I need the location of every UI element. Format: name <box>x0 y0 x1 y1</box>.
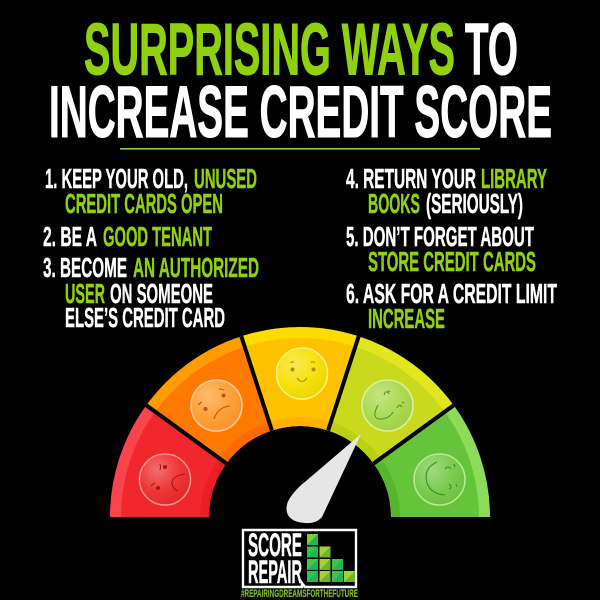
list: left column: 2. BE A <box>43 221 97 252</box>
gauge segment: yellow <box>241 327 359 430</box>
gauge needle <box>286 434 361 523</box>
face: neutral smile <box>276 348 328 399</box>
title <box>49 10 552 153</box>
list: right column: INCREASE <box>368 303 445 334</box>
list: left column: 3. BECOME <box>43 252 127 283</box>
list: left column: GOOD TENANT <box>103 221 212 252</box>
list: right column: LIBRARY <box>481 163 547 194</box>
list: left column: ON SOMEONE <box>110 278 213 309</box>
list: right column <box>346 163 557 334</box>
list: right column: BOOKS <box>368 188 420 219</box>
list: left column: AN AUTHORIZED <box>133 252 259 283</box>
face: happy <box>362 380 413 431</box>
logo: REPAIR <box>248 554 302 590</box>
logo wordmark <box>248 527 302 590</box>
list: left column: USER <box>65 278 105 309</box>
gauge segment: red <box>110 405 226 517</box>
logo <box>241 527 358 600</box>
list: right column: (SERIOUSLY) <box>426 188 523 219</box>
logo tagline: #REPAIRINGDREAMSFORTHEFUTURE <box>241 588 358 600</box>
face: angry <box>140 454 190 505</box>
list: left column <box>43 163 259 333</box>
list: right column: 4. RETURN YOUR <box>346 163 476 194</box>
list: left column: CREDIT CARDS OPEN <box>65 188 223 219</box>
face: very happy <box>414 454 465 505</box>
list: left column: UNUSED <box>194 163 257 194</box>
face: sad <box>191 380 242 431</box>
gauge segment: orange <box>146 336 272 464</box>
logo frame <box>243 530 356 587</box>
logo bar grid <box>307 534 355 582</box>
gauge <box>110 327 490 523</box>
gauge segment: lime <box>328 336 454 464</box>
logo: SCORE <box>248 527 302 563</box>
list: left column: ELSE’S CREDIT CARD <box>65 302 225 333</box>
gauge segment: green <box>374 405 490 517</box>
title: TO <box>465 10 518 90</box>
list: left column: 1. KEEP YOUR OLD, <box>45 163 188 194</box>
